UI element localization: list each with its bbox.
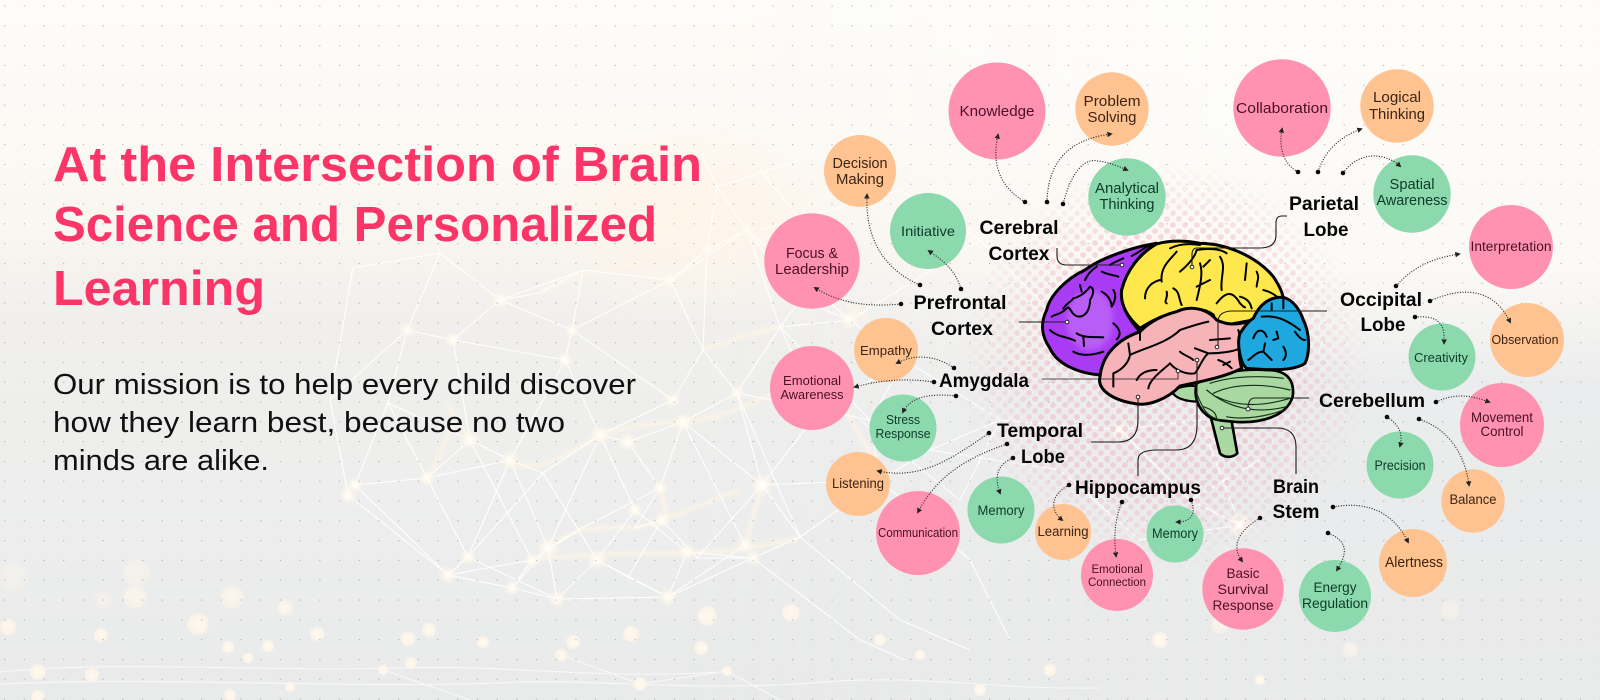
- bubble: Basic Survival Response: Basic: [1226, 565, 1260, 581]
- bubble: Initiative: [890, 193, 966, 269]
- region labels: Prefrontal: [914, 292, 1006, 314]
- background: bokeh lights: [0, 558, 1461, 700]
- bubble: Memory (hippocampus): Memory: [1152, 526, 1198, 541]
- bubble: Creativity: Creativity: [1414, 350, 1468, 365]
- bubble: Stress Response: Response: [876, 426, 930, 441]
- bubble: Basic Survival Response: Response: [1212, 597, 1274, 613]
- bubble: Observation: [1490, 303, 1564, 377]
- bubble: Memory: [968, 476, 1034, 544]
- bubble: Emotional Connection: Connection: [1088, 577, 1146, 589]
- bubble: Alertness: [1379, 529, 1447, 597]
- bubble: Initiative: Initiative: [901, 223, 955, 239]
- region labels: Lobe: [1360, 314, 1406, 336]
- bubbles: occipital lobe: [1408, 205, 1564, 390]
- bubbles: amygdala: [770, 318, 936, 462]
- region labels: Hippocampus: [1075, 477, 1201, 499]
- bubble: Stress Response: [870, 394, 936, 462]
- region labels: Cerebellum: [1319, 390, 1425, 412]
- region labels: Stem: [1272, 501, 1320, 523]
- brain: occipital lobe blue: [1239, 297, 1309, 370]
- bubble: Problem Solving: Solving: [1088, 109, 1136, 126]
- region labels: Cerebral: [980, 217, 1058, 239]
- bubble: Empathy: [854, 318, 918, 382]
- region labels: Cortex: [988, 243, 1050, 265]
- bubble: Basic Survival Response: [1202, 548, 1284, 630]
- bubble: Collaboration: Collaboration: [1236, 100, 1328, 117]
- bubble: Interpretation: [1469, 205, 1553, 289]
- bubbles: cerebellum: [1366, 383, 1544, 533]
- bubbles: temporal lobe: [826, 452, 1034, 575]
- bubble: Spatial Awareness: [1373, 155, 1451, 233]
- bubble: Communication: [876, 491, 960, 575]
- bubble: Learning: [1035, 504, 1091, 560]
- background: glowing neural network: [0, 150, 1260, 700]
- title: Science and Personalized: [53, 198, 657, 252]
- region labels: Brain: [1273, 476, 1319, 498]
- brain: parietal lobe yellow: [1121, 241, 1283, 328]
- bubble: Energy Regulation: Energy: [1314, 579, 1356, 595]
- bubble: Emotional Awareness: Awareness: [780, 387, 844, 402]
- bubble: Communication: Communication: [878, 525, 958, 540]
- bubbles: brain stem: [1202, 529, 1447, 632]
- brain: brain stem: [1211, 417, 1237, 457]
- mission text: [53, 369, 636, 477]
- bubble: Analytical Thinking: [1088, 158, 1166, 236]
- bubbles: hippocampus: [1035, 504, 1204, 611]
- bubble: Emotional Awareness: Emotional: [783, 373, 841, 388]
- brain: frontal lobe purple: [1043, 243, 1157, 375]
- bubble: Decision Making: [824, 135, 896, 207]
- title: Learning: [53, 262, 265, 316]
- region labels: Lobe: [1304, 219, 1349, 241]
- brain: small cerebellum lobe: [1172, 386, 1200, 402]
- bubble: Collaboration: [1233, 59, 1331, 157]
- dotted arrows: [815, 129, 1510, 570]
- bubble: Knowledge: Knowledge: [960, 103, 1034, 120]
- bubble: Stress Response: Stress: [886, 412, 920, 427]
- bubble: Spatial Awareness: Awareness: [1376, 193, 1448, 209]
- bubble: Empathy: Empathy: [860, 343, 912, 358]
- bubble: Spatial Awareness: Spatial: [1390, 177, 1434, 193]
- bubble: Logical Thinking: Thinking: [1369, 107, 1425, 123]
- mission text: how they learn best, because no two: [53, 407, 565, 439]
- bubble: Focus and Leadership: Focus &: [786, 246, 838, 262]
- bubbles: parietal lobe: [1233, 59, 1451, 233]
- bubble: Emotional Awareness: [770, 346, 854, 430]
- bubble: Knowledge: [948, 62, 1046, 160]
- region labels: Temporal: [997, 420, 1083, 442]
- bubble: Emotional Connection: [1081, 539, 1153, 611]
- bubble: Balance: [1441, 469, 1505, 533]
- brain illustration: [1043, 241, 1309, 457]
- title: [53, 138, 702, 316]
- region labels: Occipital: [1340, 289, 1422, 311]
- bubble: Observation: Observation: [1492, 332, 1558, 347]
- bubble: Basic Survival Response: Survival: [1218, 581, 1268, 597]
- region labels: Cortex: [931, 318, 993, 340]
- bubble: Decision Making: Decision: [832, 156, 888, 172]
- bubble: Decision Making: Making: [836, 172, 884, 188]
- bubble: Balance: Balance: [1450, 491, 1497, 507]
- bubble: Energy Regulation: Regulation: [1302, 595, 1368, 611]
- leader lines: [1019, 216, 1327, 476]
- region labels: Lobe: [1021, 446, 1065, 468]
- bubble: Learning: Learning: [1038, 524, 1088, 539]
- mission text: minds are alike.: [53, 445, 269, 477]
- bubble: Precision: [1366, 432, 1434, 498]
- bubble: Movement Control: [1460, 383, 1544, 467]
- bubble: Creativity: [1408, 324, 1476, 390]
- bubble: Analytical Thinking: Analytical: [1095, 181, 1159, 197]
- bubble: Focus and Leadership: [764, 213, 860, 309]
- region labels: Parietal: [1289, 193, 1359, 215]
- title: At the Intersection of Brain: [53, 138, 702, 192]
- bubble: Analytical Thinking: Thinking: [1100, 197, 1154, 213]
- bubble: Logical Thinking: Logical: [1373, 90, 1421, 106]
- bubble: Problem Solving: [1075, 72, 1149, 146]
- bubbles: cerebral cortex: [948, 62, 1166, 236]
- bubble: Interpretation: Interpretation: [1470, 239, 1552, 254]
- bubble: Focus and Leadership: Leadership: [775, 262, 849, 278]
- bubble: Memory: Memory: [978, 503, 1025, 518]
- bubble: Logical Thinking: [1360, 69, 1434, 143]
- bubble: Movement Control: Movement: [1471, 409, 1533, 425]
- bubble: Listening: [826, 452, 890, 516]
- bubble: Alertness: Alertness: [1385, 555, 1443, 571]
- mission text: Our mission is to help every child discover: [53, 369, 636, 401]
- bubble: Memory (hippocampus): [1146, 506, 1204, 562]
- bubble: Energy Regulation: [1299, 560, 1371, 632]
- region labels: Amygdala: [939, 370, 1029, 392]
- region labels: [914, 193, 1425, 523]
- background: pink halftone behind brain: [980, 176, 1352, 550]
- bubble: Listening: Listening: [832, 476, 884, 491]
- bubbles: prefrontal cortex: [764, 135, 966, 309]
- bubble: Precision: Precision: [1374, 458, 1426, 473]
- bubble: Problem Solving: Problem: [1084, 93, 1140, 110]
- brain: cerebellum: [1196, 370, 1293, 422]
- brain: temporal lobe pink: [1100, 308, 1250, 404]
- bubble: Movement Control: Control: [1480, 423, 1524, 439]
- bubble: Emotional Connection: Emotional: [1092, 564, 1142, 576]
